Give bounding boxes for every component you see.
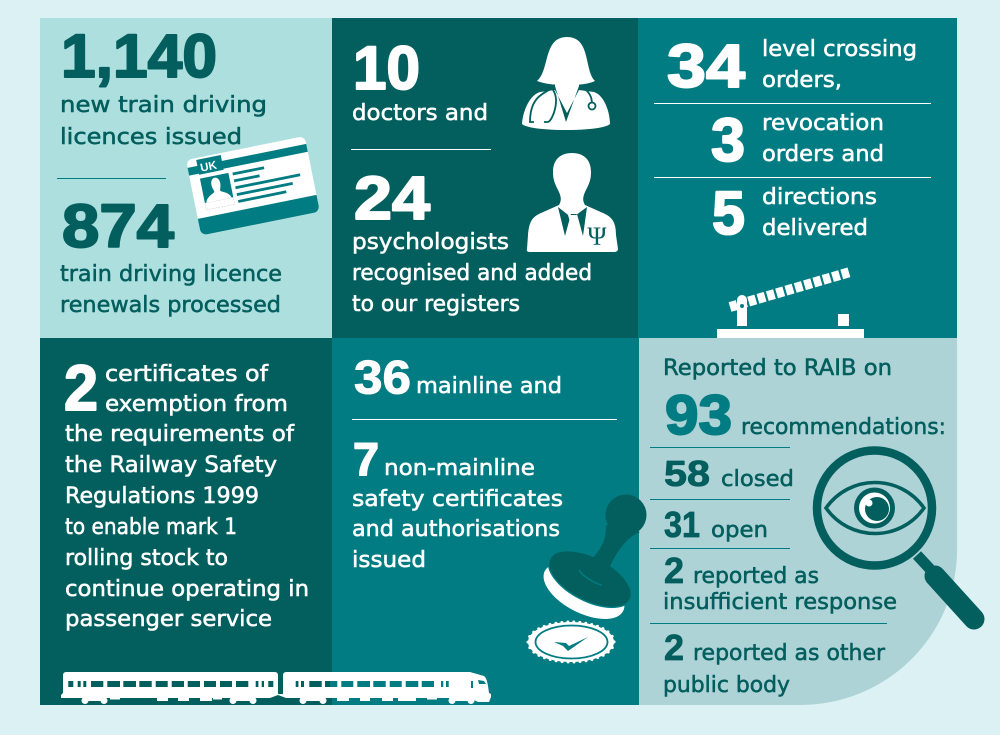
text: licence renewals processed: train driving licence <box>60 262 282 287</box>
text: doctors and: doctors and <box>352 101 488 126</box>
icon: train silhouette <box>61 672 491 704</box>
text: licence renewals processed: renewals processed <box>60 293 281 318</box>
number: 5: 5 <box>712 179 745 247</box>
row: 58 closed <box>664 453 794 494</box>
text: exemption description: exemption from <box>105 392 288 417</box>
text: non-mainline safety certificates: issued <box>352 548 426 573</box>
text: exemption description <box>65 362 309 632</box>
row: 2 reported as other public body: reported as other <box>693 641 886 666</box>
text: revocation orders: orders and <box>762 142 884 167</box>
number: 34: 34 <box>667 32 745 100</box>
number: 24: 24 <box>354 164 430 232</box>
text: exemption description: the Railway Safety <box>65 453 277 478</box>
panel: train driving licences <box>40 18 332 338</box>
row: 2 reported as insufficient response <box>663 550 897 615</box>
text: exemption description: to enable mark 1 <box>65 515 237 540</box>
text: directions delivered: directions <box>762 185 877 210</box>
number: 1,140: 1,140 <box>61 22 217 90</box>
row: 2 reported as other public body <box>663 627 886 698</box>
panel: level crossing orders <box>638 18 957 338</box>
text: revocation orders <box>762 111 884 167</box>
row: 2 reported as insufficient response: 2 <box>664 550 684 591</box>
icon: UK driving licence card: UK <box>199 160 219 175</box>
row: 31 open: open <box>711 518 768 543</box>
text: level crossing orders: orders, <box>762 68 842 93</box>
text: licence renewals processed <box>60 262 282 318</box>
number: 7: 7 <box>353 433 379 485</box>
text: psychologists recognised and added: to our registers <box>352 292 520 317</box>
text: reported to RAIB: Reported to RAIB on <box>663 356 892 381</box>
text: psychologists recognised and added: recognised and added <box>352 261 592 286</box>
icon: male psychologist with psi symbol <box>527 153 618 252</box>
text: non-mainline safety certificates <box>352 456 563 573</box>
text: directions delivered <box>762 185 877 241</box>
row: 58 closed: closed <box>721 467 794 492</box>
text: psychologists recognised and added <box>352 230 592 317</box>
row: 31 open: 31 <box>664 504 700 545</box>
number: 2: 2 <box>64 352 98 424</box>
text: level crossing orders: level crossing <box>762 37 917 62</box>
text: psychologists recognised and added: psychologists <box>352 230 509 255</box>
row: 31 open <box>664 504 768 545</box>
panel: doctors and psychologists <box>332 18 638 338</box>
text: recommendations: recommendations: <box>741 415 946 440</box>
panel: safety certificates <box>332 338 639 705</box>
row: 58 closed: 58 <box>664 453 710 494</box>
text: non-mainline safety certificates: and authorisations <box>352 517 560 542</box>
number: 3: 3 <box>711 106 745 174</box>
text: revocation orders: revocation <box>762 111 884 136</box>
panel: certificates of exemption <box>40 338 332 705</box>
number: 874: 874 <box>62 192 174 260</box>
icon: level crossing barrier <box>717 272 864 338</box>
text: directions delivered: delivered <box>762 216 868 241</box>
text: new licences issued: new train driving <box>60 93 267 118</box>
icon: rubber stamp with seal <box>528 494 646 662</box>
icon: magnifying glass with eye <box>817 450 974 619</box>
text: exemption description: passenger service <box>65 607 272 632</box>
text: level crossing orders <box>762 37 917 93</box>
text: exemption description: certificates of <box>105 362 269 387</box>
icon: UK driving licence card <box>186 136 320 235</box>
row: 2 reported as other public body: 2 <box>664 627 684 668</box>
text: exemption description: Regulations 1999 <box>65 484 259 509</box>
text: exemption description: rolling stock to <box>65 546 228 571</box>
icon: male psychologist with psi symbol: Ψ <box>587 222 607 251</box>
text: non-mainline safety certificates: non-mainline <box>384 456 535 481</box>
number: 10: 10 <box>353 34 420 102</box>
row: 2 reported as insufficient response: insufficient response <box>663 590 897 615</box>
number: 93: 93 <box>665 383 732 446</box>
text: mainline and: mainline and <box>416 374 562 399</box>
text: exemption description: continue operating in <box>65 577 309 602</box>
text: new licences issued: licences issued <box>60 125 242 150</box>
text: exemption description: the requirements of <box>65 422 295 447</box>
number: 36: 36 <box>354 350 411 404</box>
text: new licences issued <box>60 93 267 150</box>
row: 2 reported as other public body: public body <box>663 673 790 698</box>
row: 2 reported as insufficient response: reported as <box>693 564 819 589</box>
text: non-mainline safety certificates: safety certificates <box>352 487 563 512</box>
icon: female doctor with stethoscope <box>522 37 610 130</box>
panel: RAIB recommendations <box>639 338 974 705</box>
